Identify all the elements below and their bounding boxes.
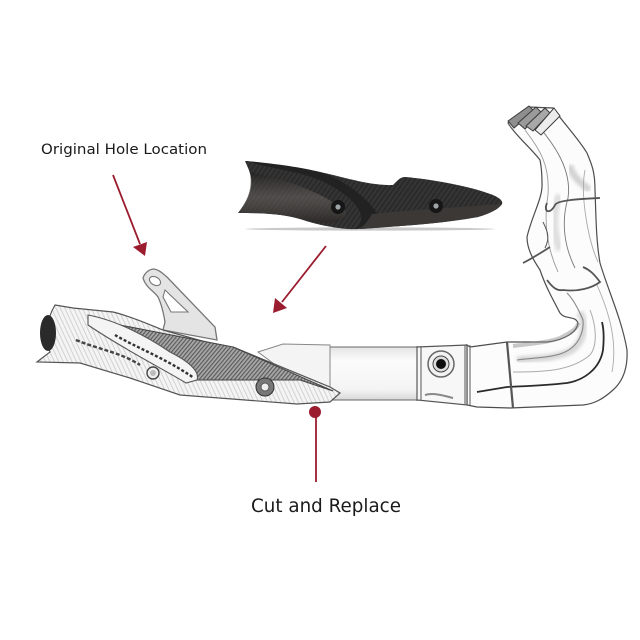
label: cut and replace: Cut and Replace [251,495,401,517]
mounting bracket [143,269,217,340]
manifold pipes [467,107,627,408]
bolt: right [429,199,443,213]
tube edges [477,122,614,408]
manifold shading [513,165,590,360]
collar section with sensor port [417,345,470,405]
bolt: left [331,200,345,214]
manifold top flanges [508,106,560,135]
carbon fibre heat shield product [238,161,502,231]
arrow: to heat shield position [273,246,326,313]
flange rings [523,198,600,291]
label: original hole location: Original Hole Location [41,142,207,158]
bolt: sketch right [256,378,274,396]
silencer with carbon shield (sketch) [37,305,340,404]
silencer outlet [40,315,56,351]
short sleeve [258,344,330,387]
exhaust system sketch [37,106,627,408]
pointer: cut line [309,406,321,482]
main straight pipe [290,347,418,400]
bolt: sketch left [147,367,159,379]
arrow: to original hole [113,175,147,256]
